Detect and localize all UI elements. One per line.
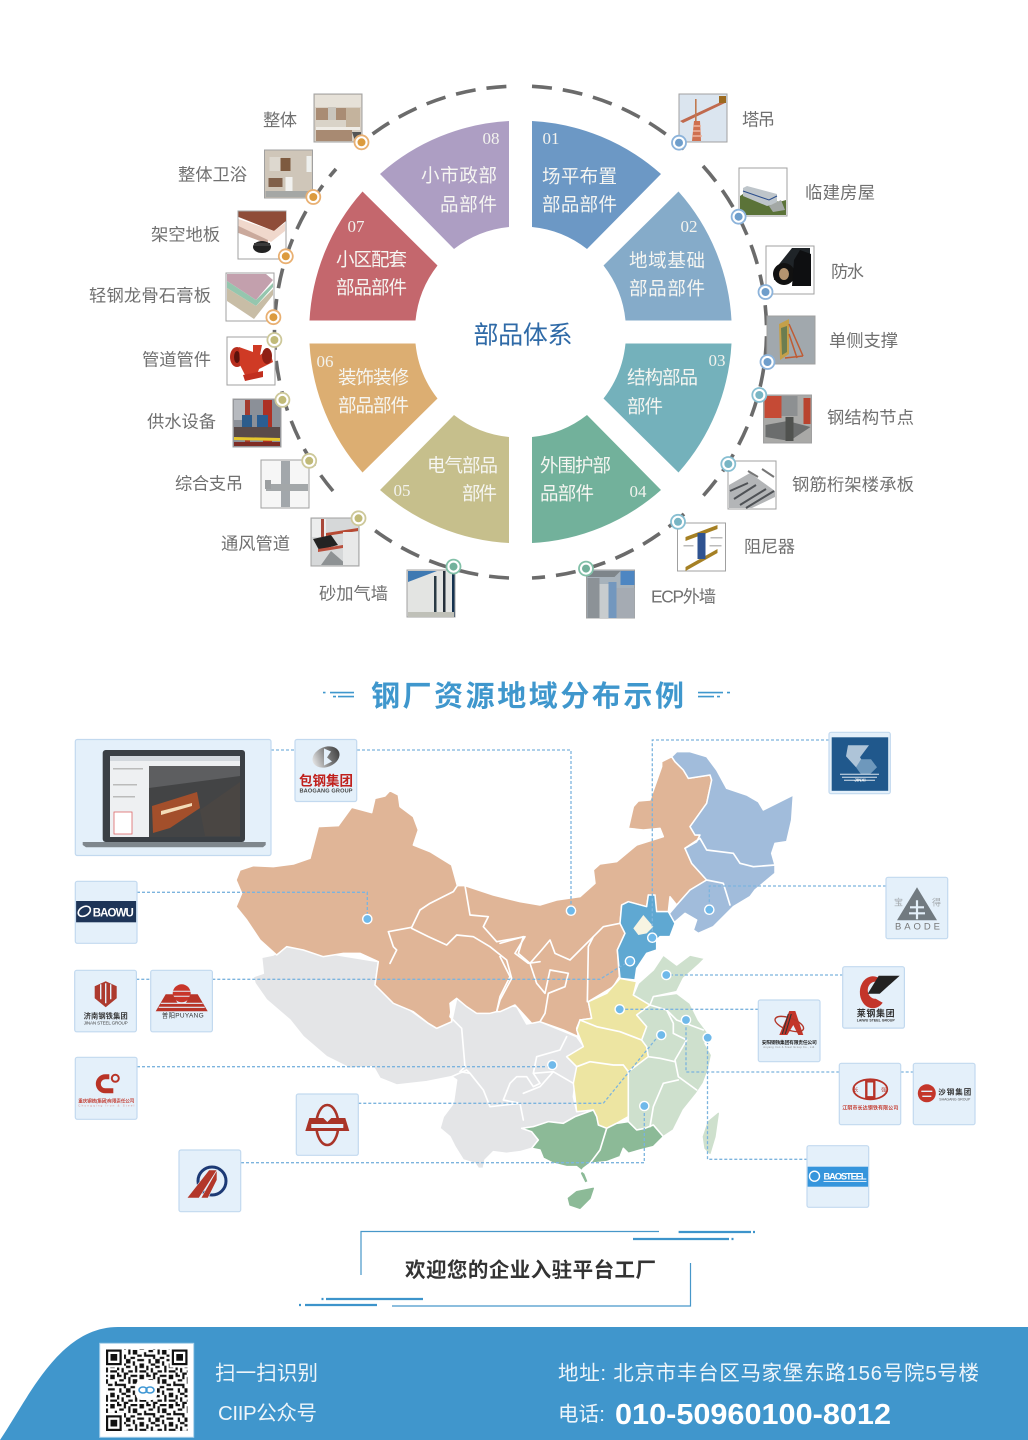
China map [236,752,793,1208]
logo: Baowu [75,881,137,943]
logo: Baode [886,877,948,939]
segment 07: 07 [348,217,365,236]
segment 05: 部件 [462,483,497,504]
logo: Chongqing Steel: Chongqing Iron & Steel [78,1103,135,1107]
Hebei (deep blue) [617,895,675,980]
segment 01: 部品部件 [542,194,617,215]
thumbnail: combined support bracket [261,460,309,508]
northeast region (blue) [667,752,793,933]
logo: Jinan Steel: JINAN STEEL GROUP [84,1020,128,1025]
logo: round gate mark [296,1094,358,1155]
product thumbnails [226,94,815,618]
logo: Baogang [295,740,357,802]
thumbnail captions: 轻钢龙骨石膏板 [89,286,211,306]
segment 02: 部品部件 [629,278,705,299]
logo: Baode: BAODE [895,921,940,932]
ring nodes [266,135,774,576]
segment 07: 部品部件 [336,277,407,298]
thumbnail: tower crane [679,94,727,142]
logo: Laiwu Steel [843,967,904,1028]
logo: Shagang: 沙钢集团 [938,1086,971,1096]
segment 01: 01 [542,129,560,148]
banner accents [299,1232,755,1305]
segment 08: 08 [482,129,500,148]
QR caption: 扫一扫识别 [215,1362,318,1385]
segment 08: 品部件 [440,194,497,215]
logo: Baosteel [807,1146,869,1207]
thumbnail captions: 综合支吊 [175,474,243,494]
thumbnail: ECP exterior wall [586,570,634,618]
thumbnail captions: 通风管道 [221,534,290,554]
thumbnail captions: 临建房屋 [805,182,875,202]
thumbnail captions: 防水 [831,262,864,282]
QR code [100,1343,194,1437]
connector lines [136,740,914,1163]
logo: Baogang: 包钢集团 [299,772,353,788]
segment 07 [310,192,438,320]
thumbnail: pipe fittings [227,337,275,385]
segment 02 [604,192,732,320]
thumbnail captions: 钢筋桁架楼承板 [792,474,914,494]
thumbnail captions: 供水设备 [147,412,216,432]
segment 02: 02 [680,217,698,236]
logo: Baosteel: BAOSTEEL [824,1172,867,1182]
thumbnail: steel node [764,395,812,443]
account name: CIIP公众号 [218,1402,317,1425]
thumbnail: aerated concrete wall [407,570,455,617]
banner text: 欢迎您的企业入驻平台工厂 [405,1258,656,1282]
segment 05 [380,415,509,543]
segment 05: 电气部品 [427,455,498,476]
northwest region (orange) [236,757,712,1037]
logo: Shagang: SHAGANG GROUP [939,1097,971,1101]
heading decoration left [323,693,354,697]
segment 04: 外围护部 [540,455,611,476]
centre title: 部品体系 [474,322,572,350]
logo: Puyang [151,970,212,1032]
thumbnail: waterproof roll [766,246,814,294]
thumbnail: bathroom [264,150,312,198]
laptop panel [75,740,271,856]
logo: Baowu: BAOWU [93,907,134,919]
logo: Baode: 宝 [894,896,903,907]
segment 04 [532,415,661,543]
logo: Shagang [913,1063,975,1125]
south region (green) [522,1110,663,1183]
thumbnail captions: 钢结构节点 [827,408,914,428]
laptop base [83,842,266,847]
Beijing [633,915,653,935]
address: 地址: 北京市丰台区马家堡东路156号院5号楼 [558,1362,979,1385]
logo: Puyang: 普阳PUYANG [162,1010,204,1019]
thumbnail captions: 单侧支撑 [829,330,898,350]
Hainan island [568,1188,593,1208]
thumbnail captions: 管道管件 [142,350,211,370]
thumbnail: damper [678,523,726,571]
segment 03: 结构部品 [627,367,698,388]
segment 08 [380,121,509,249]
logo: Baogang: BAOGANG GROUP [300,788,353,794]
segment 01: 场平布置 [542,166,617,187]
welcome banner [299,1232,755,1306]
segment 01 [532,121,661,249]
thumbnail captions: 整体卫浴 [178,164,247,184]
segment 04: 04 [630,482,647,501]
thumbnail captions: 架空地板 [151,224,220,244]
logo: Chongqing Steel: 重庆钢铁(集团)有限责任公司 [78,1097,135,1104]
thumbnail captions: 整体 [263,110,297,130]
segment 06: 装饰装修 [338,367,409,388]
segment 06: 06 [316,352,334,371]
logo: Changqiang Steel [839,1063,901,1125]
province borders [388,838,775,1163]
logo: Anyang Steel: Anyang Iron & Steel Group Co., Ltd. [763,1045,816,1049]
logo: blue ring with red stripes [179,1150,241,1212]
segment 07: 小区配套 [336,249,407,270]
thumbnail: water supply equipment [233,399,281,447]
logo: Jinxi [829,732,890,794]
thumbnail captions [89,110,914,606]
thumbnail captions: ECP外墙 [651,586,716,606]
logo: Laiwu Steel: LAIWU STEEL GROUP [857,1019,895,1023]
thumbnail: gypsum board [226,273,274,321]
logo: Anyang Steel [758,1000,820,1062]
segment 06: 部品部件 [338,395,409,416]
thumbnail captions: 砂加气墙 [319,584,388,604]
logo: Baode: 得 [932,896,941,907]
footer bar [0,1327,1028,1440]
heading decoration right [698,693,730,697]
logo: Changqiang Steel: 强 [881,1087,886,1093]
laptop screen [103,750,245,842]
logo: Changqiang Steel: 江阴市长达钢铁有限公司 [842,1104,898,1111]
dashed outer ring [274,86,767,578]
logo: Laiwu Steel: 莱钢集团 [857,1008,895,1019]
Shandong (pale green) [633,955,705,1005]
heading text: 钢厂资源地域分布示例 [371,680,684,713]
segment 03: 部件 [627,396,663,417]
southwest region (grey) [253,947,593,1168]
parts system wheel [274,86,767,578]
thumbnail captions: 阻尼器 [744,536,795,556]
segment 03 [604,344,732,472]
logo: Anyang Steel: 安阳钢铁集团有限责任公司 [762,1039,817,1046]
map location dots [363,905,714,1111]
segment 03: 03 [708,351,726,370]
segment 04: 品部件 [540,483,594,504]
thumbnail: rebar truss deck [728,461,776,509]
logo: Jinan Steel [75,970,136,1032]
segment 06 [310,344,438,472]
thumbnail: whole kitchen [314,94,362,142]
thumbnail: raised floor [238,211,286,259]
logo: Jinxi: JINXI [854,777,866,782]
central region (yellow) [567,978,650,1128]
segment 08: 小市政部 [421,165,497,186]
banner frame [361,1232,690,1306]
thumbnail: ventilation duct [311,518,359,566]
section heading [323,680,730,713]
logo: Changqiang Steel: 长 [853,1086,858,1093]
thumbnail: temporary housing [739,168,787,216]
segment 05: 05 [394,481,410,500]
logo: Jinan Steel: 济南钢铁集团 [84,1011,128,1020]
phone number: 010-50960100-8012 [615,1399,891,1431]
east region (pale green) [628,993,712,1137]
segment 02: 地域基础 [629,250,705,271]
phone label: 电话: [558,1403,605,1426]
Taiwan island [703,1113,718,1153]
logo: Chongqing Steel [75,1057,137,1119]
thumbnail captions: 塔吊 [742,110,775,130]
thumbnail: one-side support [767,316,815,364]
